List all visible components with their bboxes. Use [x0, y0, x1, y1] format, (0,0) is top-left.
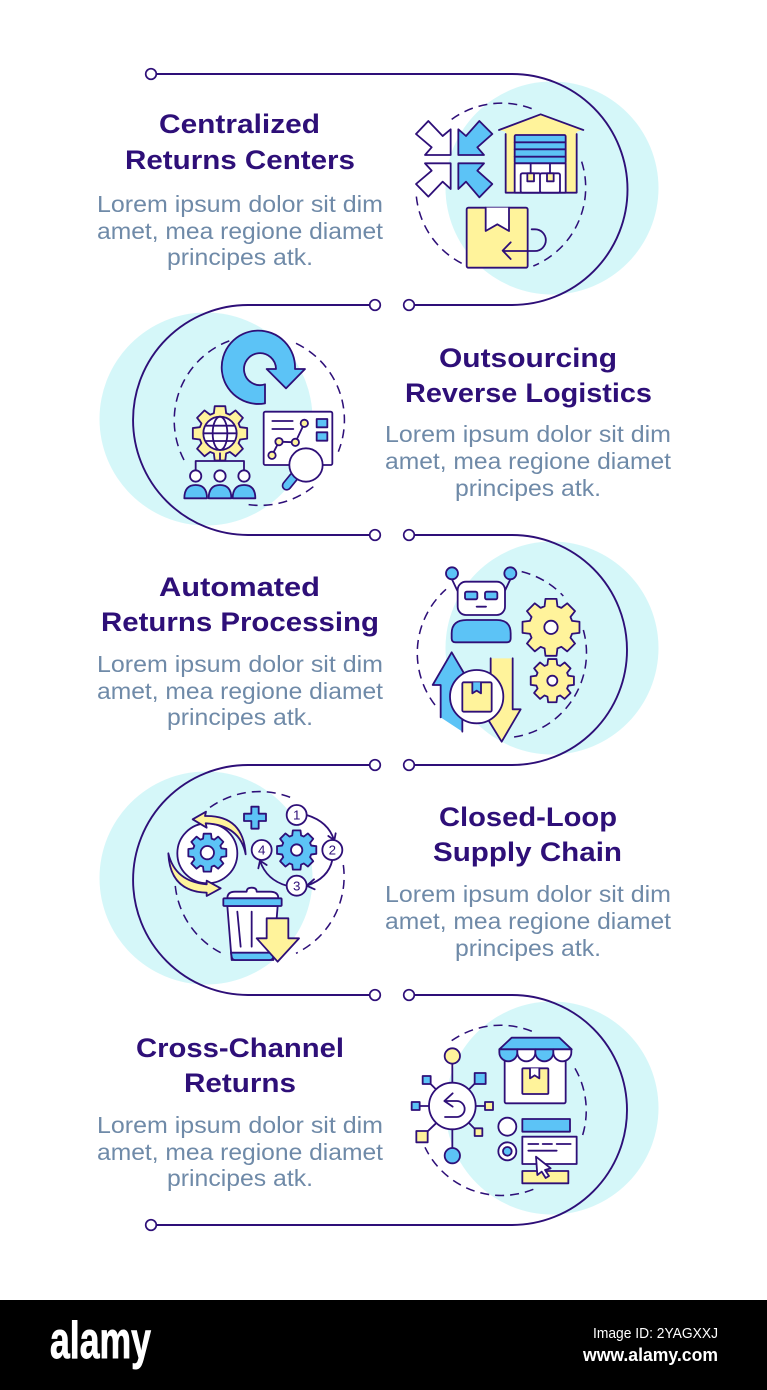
panel: cross-channel returns [97, 990, 658, 1230]
body text: Lorem ipsum dolor sit dim [385, 421, 671, 447]
end node [404, 300, 414, 310]
connector line [156, 74, 628, 305]
cycle numbers: 3 [293, 878, 300, 893]
background circle [100, 772, 312, 984]
icon: robot, gears and up/down arrows [417, 567, 586, 742]
start node [146, 69, 156, 79]
body text: amet, mea regione diamet [385, 448, 671, 474]
body text: principes atk. [455, 935, 601, 961]
body text: amet, mea regione diamet [385, 908, 671, 934]
icon: warehouse, arrows and returned box [416, 103, 586, 268]
cycle numbers [258, 808, 336, 893]
body text: amet, mea regione diamet [97, 1139, 383, 1165]
panel: closed-loop supply chain [100, 760, 671, 1000]
background circle [100, 312, 312, 526]
heading: Returns [184, 1068, 296, 1098]
image id: Image ID: 2YAGXXJ [593, 1325, 718, 1342]
body text: Lorem ipsum dolor sit dim [97, 191, 383, 217]
connector line [414, 535, 627, 765]
icon: gears, numbered cycle and trash bin [168, 792, 344, 962]
body text: amet, mea regione diamet [97, 678, 383, 704]
start node [370, 760, 380, 770]
icon: circular arrow, globe gear, team and dashboard [174, 331, 344, 505]
panel: automated returns processing [97, 530, 658, 770]
website: www.alamy.com [582, 1345, 718, 1365]
start node [404, 990, 414, 1000]
panel: centralized returns centers [97, 69, 658, 310]
alamy logo: alamy [50, 1312, 151, 1370]
heading: Supply Chain [433, 837, 622, 867]
connector line [156, 995, 627, 1225]
body text: Lorem ipsum dolor sit dim [385, 881, 671, 907]
body text: amet, mea regione diamet [97, 218, 383, 244]
heading: Outsourcing [439, 343, 617, 373]
background circle [446, 542, 658, 754]
connector line [133, 765, 370, 995]
end node [370, 990, 380, 1000]
body text: principes atk. [167, 244, 313, 270]
heading: Automated [159, 572, 320, 602]
heading: Cross-Channel [136, 1033, 344, 1063]
heading: Returns Centers [125, 145, 355, 175]
end node [404, 760, 414, 770]
end node [146, 1220, 156, 1230]
heading: Closed-Loop [439, 802, 617, 832]
cycle numbers: 2 [329, 843, 336, 858]
heading: Returns Processing [101, 607, 379, 637]
body text: Lorem ipsum dolor sit dim [97, 651, 383, 677]
icon: store, return hub and online form [412, 1025, 586, 1195]
background circle [446, 82, 658, 294]
footer bar [0, 1300, 767, 1390]
cycle numbers: 1 [293, 808, 300, 823]
panel: outsourcing reverse logistics [100, 300, 671, 540]
body text: principes atk. [167, 1165, 313, 1191]
background circle [446, 1002, 658, 1214]
body text: principes atk. [167, 704, 313, 730]
body text: Lorem ipsum dolor sit dim [97, 1112, 383, 1138]
heading: Centralized [159, 109, 320, 139]
heading: Reverse Logistics [405, 378, 652, 408]
cycle numbers: 4 [258, 843, 266, 858]
connector line [133, 305, 370, 535]
start node [404, 530, 414, 540]
end node [370, 530, 380, 540]
start node [370, 300, 380, 310]
body text: principes atk. [455, 475, 601, 501]
